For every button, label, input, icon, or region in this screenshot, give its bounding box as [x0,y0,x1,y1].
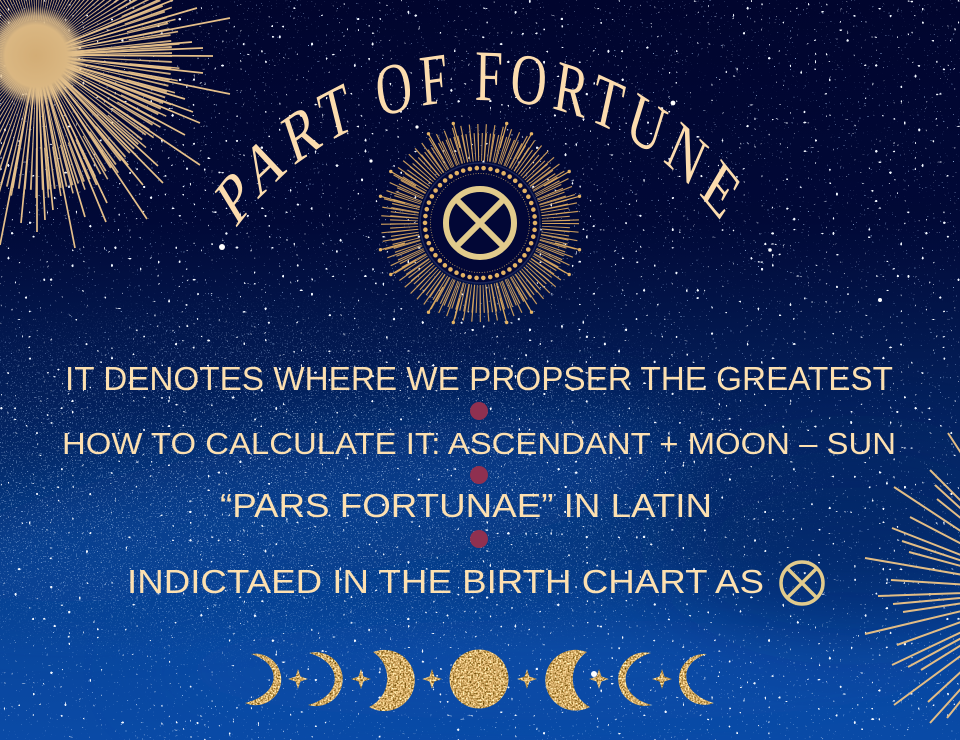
moon: waxing gibbous [369,650,415,711]
moon: waning crescent thin [679,654,714,705]
fortune symbol [446,189,514,257]
divider dot 1 [470,402,488,420]
icon: fortune symbol small [781,562,823,604]
title: curved heading: PART OF FORTUNE [214,52,740,228]
star 1 [288,669,308,689]
statement: where we prosper: IT DENOTES WHERE WE PROPSER THE GREATEST [65,360,893,397]
sunburst: right edge [865,433,960,723]
statement: how to calculate: HOW TO CALCULATE IT: ASCENDANT + MOON – SUN [62,426,896,461]
sunburst: top-left corner [0,0,230,248]
star 2 [351,669,371,689]
divider dot 2 [470,466,488,484]
star 5 [589,669,609,689]
moon: full [450,650,508,708]
star 3 [422,669,442,689]
statement: latin name: “PARS FORTUNAE” IN LATIN [220,487,712,524]
moon: waxing crescent thin [245,654,281,705]
moon phases row [245,650,714,711]
star 4 [517,669,537,689]
medallion bead ring [425,168,535,278]
moon: waxing crescent [308,652,343,706]
divider dot 3 [470,530,488,548]
medallion: part of fortune emblem [379,122,581,324]
star 6 [652,669,672,689]
moon: waning gibbous [545,650,590,711]
statement: birth chart symbol: INDICTAED IN THE BIRTH CHART AS [127,563,764,600]
moon: waning crescent [618,652,652,706]
medallion ray tips [379,122,581,324]
medallion rays [380,124,580,322]
